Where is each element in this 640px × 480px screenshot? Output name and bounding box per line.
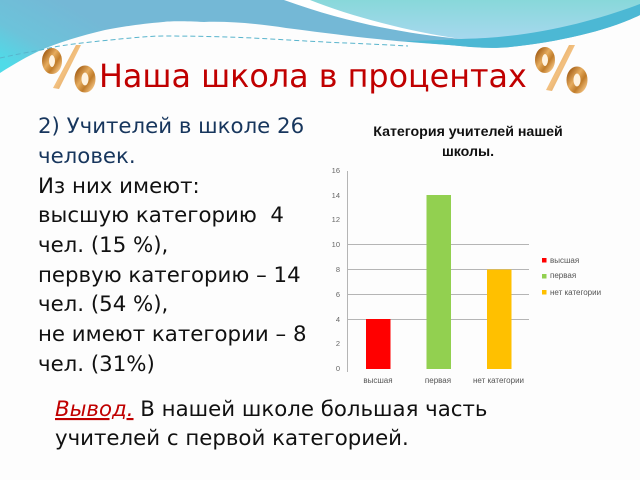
y axis labels: 6 [336, 290, 340, 299]
y axis labels [332, 166, 340, 373]
chart title: Категория учителей нашей [373, 124, 563, 140]
header wave [0, 0, 640, 73]
list: categories: Из них имеют: [38, 174, 200, 199]
list: categories: чел. (31%) [38, 352, 155, 377]
list: categories [38, 174, 306, 377]
y axis labels: 14 [332, 191, 340, 200]
legend: высшая [550, 256, 579, 265]
y axis labels: 2 [336, 339, 340, 348]
axes and grid lines [348, 171, 529, 372]
y axis labels: 12 [332, 215, 340, 224]
chart: teacher categories [332, 124, 601, 385]
legend [542, 256, 601, 297]
y axis labels: 4 [336, 315, 340, 324]
y axis labels: 16 [332, 166, 340, 175]
bar: высшая 4 [366, 319, 390, 369]
legend: первая [550, 271, 576, 280]
icon: percent sign right [538, 45, 584, 91]
bar: первая 14 [426, 195, 451, 369]
list: categories: чел. (15 %), [38, 233, 168, 258]
text block: teachers statistics [38, 114, 306, 377]
bar: нет категории 8 [487, 270, 512, 369]
conclusion text [55, 397, 487, 451]
y axis labels: 10 [332, 240, 340, 249]
list: categories: высшую категорию 4 [38, 203, 284, 228]
y axis labels: 0 [336, 364, 340, 373]
x axis labels: высшая [363, 376, 393, 385]
heading: teachers count: человек. [38, 144, 136, 169]
chart title [373, 124, 563, 160]
conclusion text: учителей с первой категорией. [55, 426, 409, 451]
x axis labels [363, 376, 524, 385]
list: categories: чел. (54 %), [38, 292, 168, 317]
icon: percent sign left [46, 45, 92, 89]
title: Наша школа в процентах [99, 58, 527, 95]
y axis labels: 8 [336, 265, 340, 274]
heading: teachers count: 2) Учителей в школе 26 [38, 114, 304, 139]
list: categories: первую категорию – 14 [38, 263, 301, 288]
x axis labels: первая [425, 376, 451, 385]
heading: teachers count [38, 114, 304, 169]
conclusion text: Вывод. В нашей школе большая часть [55, 397, 487, 422]
legend: нет категории [550, 288, 601, 297]
list: categories: не имеют категории – 8 [38, 322, 306, 347]
chart title: школы. [442, 144, 494, 160]
x axis labels: нет категории [473, 376, 524, 385]
